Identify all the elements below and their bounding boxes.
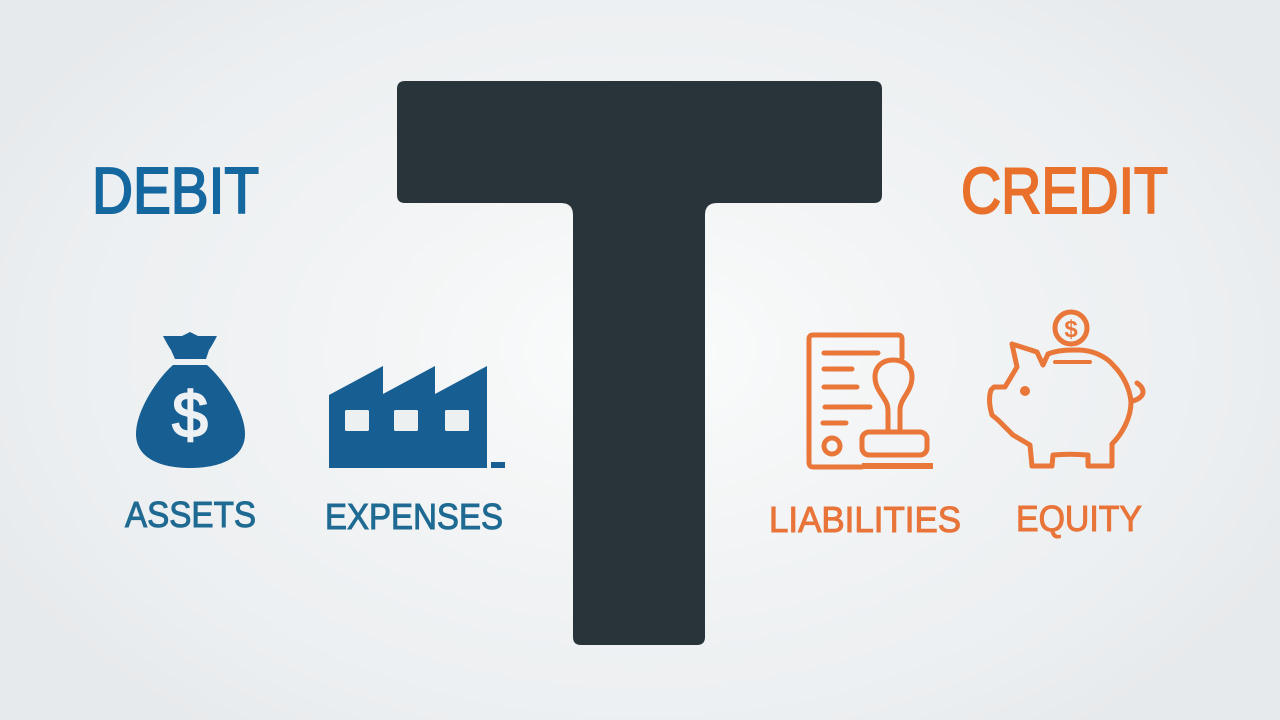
panel: credit side xyxy=(769,154,1168,540)
panel: debit side xyxy=(92,154,505,537)
icon: piggy bank xyxy=(990,312,1143,466)
label: assets: ASSETS xyxy=(125,494,256,535)
icon: money bag: $ xyxy=(172,379,208,451)
icon: money bag xyxy=(136,332,245,468)
heading: debit: DEBIT xyxy=(92,154,259,227)
heading: credit: CREDIT xyxy=(961,154,1168,227)
label: equity: EQUITY xyxy=(1016,498,1142,539)
icon: factory xyxy=(329,366,505,468)
label: liabilities: LIABILITIES xyxy=(769,499,961,540)
icon: document with stamp xyxy=(809,335,933,467)
icon: piggy bank: $ xyxy=(1064,316,1078,343)
T-account shape xyxy=(397,81,882,645)
label: expenses: EXPENSES xyxy=(325,496,503,537)
